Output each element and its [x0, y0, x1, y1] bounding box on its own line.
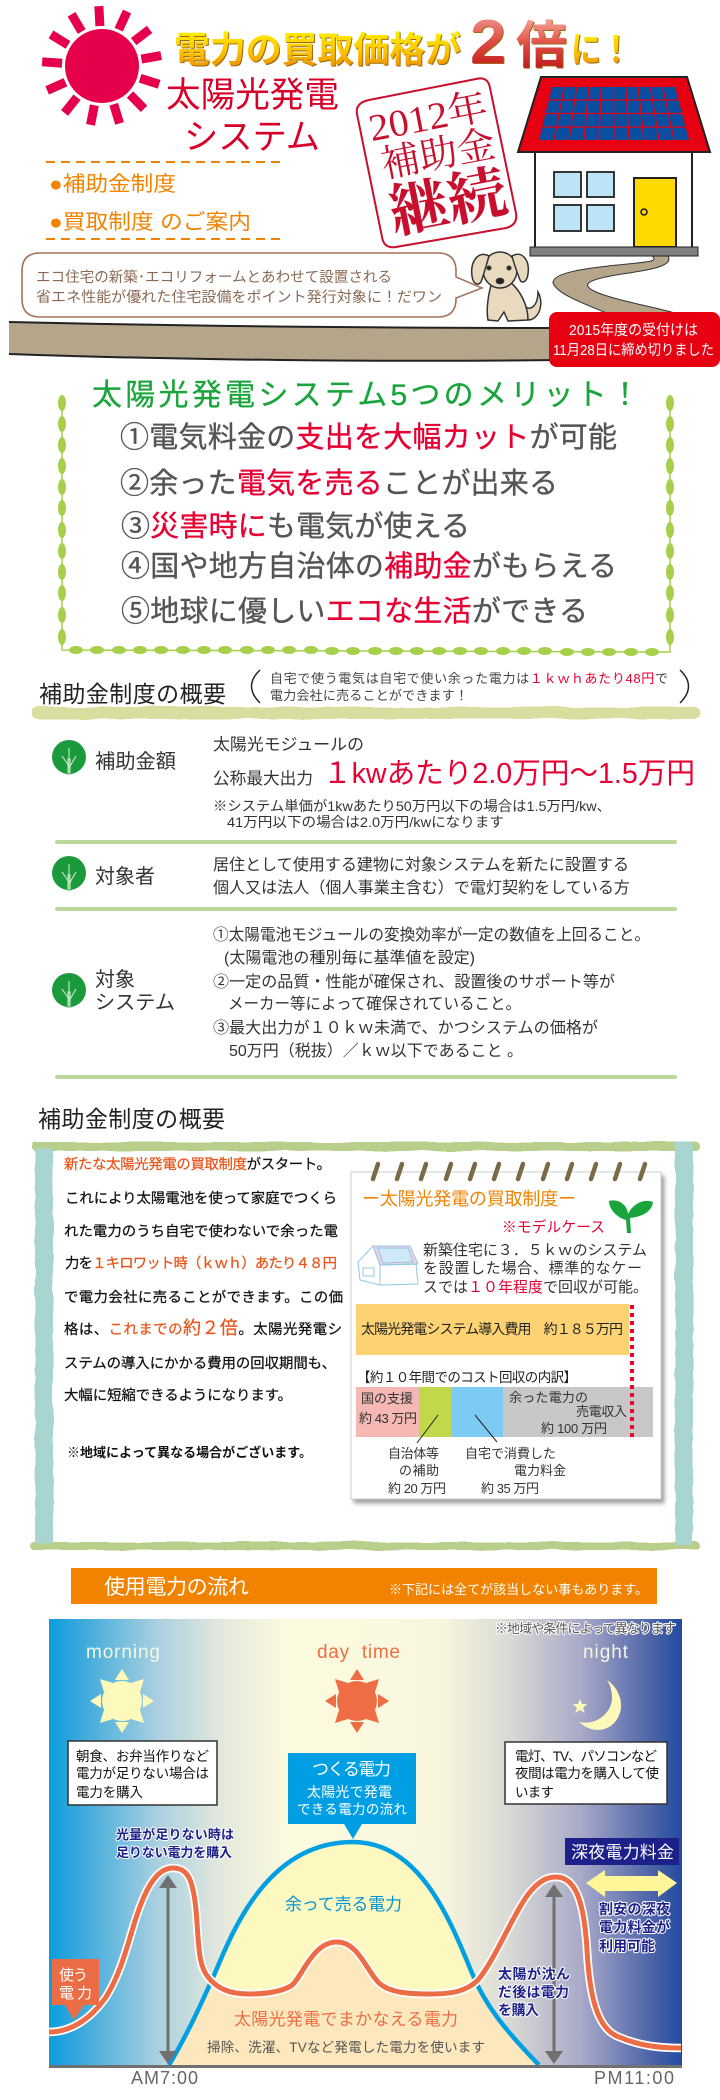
label: night: night [583, 1642, 629, 1663]
row: 対象システム: 50万円（税抜）／ｋｗ以下であること 。 [229, 1042, 523, 1060]
panel: notebook card [351, 1164, 661, 1499]
title: 電力の買取価格が2倍に！: 倍 [516, 17, 567, 74]
icon: notebook rings [373, 1164, 645, 1179]
header bar: 使用電力の流れ [71, 1568, 657, 1604]
row: 補助金額: 公称最大出力 [213, 769, 313, 788]
label: 太陽光発電でまかなえる電力: 太陽光発電でまかなえる電力 [234, 2010, 458, 2029]
list: guide items: ●補助金制度 [49, 173, 176, 196]
row: 対象システム: システム [95, 992, 175, 1014]
list: guide items [46, 162, 281, 239]
heading: 太陽光発電システム: 太陽光発電 [166, 76, 339, 115]
title: 電力の買取価格が2倍に！: に！ [571, 29, 631, 70]
row: 対象者 [52, 856, 630, 897]
callout: night: 夜間は電力を購入して使 [515, 1765, 660, 1781]
chart: cost recovery breakdown: 自治体等 [388, 1446, 439, 1461]
row: 対象者: 居住として使用する建物に対象システムを新たに設置する [213, 856, 629, 874]
callout: night: います [515, 1785, 554, 1800]
stamp: 2012年補助金継続: 継続 [384, 159, 512, 246]
notice: red deadline box: 2015年度の受付けは [569, 322, 698, 339]
chart: cost recovery breakdown: 電力料金 [514, 1463, 566, 1478]
icon: day sun [325, 1669, 389, 1733]
arrow: night height [545, 1884, 563, 2064]
speech bubble [22, 253, 482, 317]
panel: notebook card: 【約１０年間でのコスト回収の内訳】 [357, 1370, 577, 1385]
speech bubble: エコ住宅の新築･エコリフォームとあわせて設置される [36, 268, 392, 286]
heading: 太陽光発電システム [166, 76, 339, 157]
arrow: night span [586, 1870, 677, 1897]
chart: cost recovery breakdown: 約 43 万円 [359, 1411, 417, 1426]
text block: purchase scheme: ※地域によって異なる場合がございます。 [67, 1445, 312, 1460]
panel: power flow diagram [49, 1619, 682, 2088]
icon: tree [52, 856, 86, 890]
merit 3: ③災害時にも電気が使える [121, 510, 470, 543]
label: usage examples: 掃除、洗濯、TVなど発電した電力を使います [207, 2039, 485, 2055]
row: 対象システム: メーカー等によって確保されていること。 [228, 995, 521, 1013]
note in parentheses [252, 670, 688, 703]
panel: five merits [58, 379, 674, 656]
callout: つくる電力: つくる電力 [312, 1760, 391, 1779]
label: 深夜電力料金: 深夜電力料金 [571, 1843, 674, 1862]
chart: power generation and usage curves [49, 1842, 682, 2068]
text block: purchase scheme: これにより太陽電池を使って家庭でつくら [65, 1190, 337, 1207]
illustration: dog [472, 252, 541, 321]
illustration: winding path and ground [9, 256, 700, 361]
chart: cost recovery breakdown: 国の支援 [361, 1391, 413, 1406]
row: 対象システム: ②一定の品質・性能が確保され、設置後のサポート等が [213, 973, 615, 991]
header bar: 使用電力の流れ: ※下記には全てが該当しない事もあります。 [389, 1582, 648, 1597]
callout: つくる電力 [288, 1753, 416, 1839]
panel: power flow diagram: ※地域や条件によって異なります [495, 1621, 676, 1636]
label: 深夜電力料金 [565, 1838, 679, 1865]
row: 対象システム: ①太陽電池モジュールの変換効率が一定の数値を上回ること。 [213, 926, 650, 944]
callout: night [505, 1742, 667, 1804]
merit 1: ①電気料金の支出を大幅カットが可能 [120, 421, 617, 454]
callout: 使う電力: 電力 [59, 1985, 92, 2002]
text block: purchase scheme: ステムの導入にかかる費用の回収期間も、 [64, 1355, 336, 1372]
chart: cost recovery breakdown: 売電収入 [576, 1404, 627, 1419]
row: 対象システム: 対象 [95, 968, 135, 991]
note: cheap night rate [599, 1901, 670, 1954]
row: 補助金額: ※システム単価が1kwあたり50万円以下の場合は1.5万円/kw、 [213, 798, 611, 814]
heading: 補助金制度の概要 second: 補助金制度の概要 [38, 1106, 225, 1132]
text block: purchase scheme [64, 1156, 343, 1460]
row: 補助金額 [52, 735, 695, 830]
panel: notebook card: を設置した場合、標準的なケー [423, 1260, 642, 1277]
note: after sunset: 太陽が沈ん [498, 1966, 570, 1982]
axis label: PM11:00: PM11:00 [594, 2068, 674, 2088]
note: cheap night rate: 利用可能 [599, 1938, 655, 1954]
icon: morning sun [90, 1669, 154, 1733]
merit 2: ②余った電気を売ることが出来る [120, 467, 558, 500]
callout: morning: 電力が足りない場合は [76, 1766, 209, 1781]
chart: cost recovery breakdown: 約 35 万円 [481, 1481, 539, 1496]
callout: つくる電力: できる電力の流れ [297, 1802, 408, 1817]
text block: purchase scheme: 力を１キロワット時（ｋｗｈ）あたり４８円 [65, 1255, 337, 1272]
icon: red sun [42, 6, 162, 126]
heading: 補助金制度の概要: 補助金制度の概要 [39, 681, 226, 707]
text block: purchase scheme: れた電力のうち自宅で使わないで余った電 [64, 1223, 338, 1240]
title: 電力の買取価格が2倍に！ [174, 8, 631, 77]
panel: notebook card: スでは１０年程度で回収が可能。 [423, 1279, 648, 1296]
panel: brush frame [30, 1142, 700, 1550]
icon: tree [52, 973, 86, 1007]
icon: sketched house [358, 1246, 418, 1285]
merit 5: ⑤地球に優しいエコな生活ができる [121, 595, 588, 628]
row: 対象者: 個人又は法人（個人事業主含む）で電灯契約をしている方 [213, 879, 630, 897]
stamp: 2012年補助金継続 [357, 78, 516, 247]
note: after sunset [498, 1966, 570, 2018]
panel: notebook card: ※モデルケース [502, 1218, 605, 1236]
heading: 太陽光発電システム: システム [184, 118, 320, 157]
note in parentheses: 自宅で使う電気は自宅で使い余った電力は１ｋｗｈあたり48円で [270, 671, 668, 686]
chart: cost recovery breakdown: の補助 [399, 1463, 439, 1478]
label: day time: day time [317, 1642, 400, 1663]
bar: installation cost [356, 1304, 629, 1355]
text block: purchase scheme: 新たな太陽光発電の買取制度がスタート。 [64, 1156, 331, 1173]
row: 補助金額: １kwあたり2.0万円～1.5万円 [323, 758, 695, 790]
axis label: AM7:00: AM7:00 [131, 2068, 198, 2088]
callout: morning: 朝食、お弁当作りなど [76, 1749, 210, 1764]
arrow: morning height [159, 1875, 177, 2064]
icon: moon and star [573, 1680, 621, 1730]
note in parentheses: 電力会社に売ることができます！ [270, 688, 468, 703]
text block: purchase scheme: 大幅に短縮できるようになります。 [64, 1387, 292, 1404]
note: morning shortage [116, 1827, 234, 1860]
callout: 使う電力: 使う [59, 1967, 88, 1984]
row: 補助金額: 41万円以下の場合は2.0万円/kwになります [227, 814, 504, 830]
notice: red deadline box [549, 312, 720, 367]
note: cheap night rate: 割安の深夜 [599, 1901, 670, 1917]
row: 補助金額: 補助金額 [95, 750, 176, 773]
header bar: 使用電力の流れ: 使用電力の流れ [104, 1576, 249, 1599]
panel: notebook card: 新築住宅に３．５ｋｗのシステム [423, 1241, 647, 1259]
note: after sunset: だ後は電力 [498, 1984, 569, 2000]
title: 電力の買取価格が2倍に！: 電力の買取価格が [174, 29, 461, 70]
row: 補助金額: 太陽光モジュールの [213, 735, 364, 754]
chart: cost recovery breakdown: 約 100 万円 [541, 1421, 607, 1436]
chart: cost recovery breakdown: 余った電力の [509, 1390, 588, 1405]
chart: cost recovery breakdown: 自宅で消費した [465, 1446, 556, 1461]
panel: notebook card: ー太陽光発電の買取制度ー [362, 1189, 576, 1209]
text block: purchase scheme: 格は、これまでの約２倍。太陽光発電シ [64, 1318, 342, 1338]
note: morning shortage: 光量が足りない時は [116, 1827, 234, 1842]
callout: 使う電力 [52, 1959, 99, 2020]
icon: sprout [609, 1200, 653, 1233]
note: cheap night rate: 電力料金が [599, 1919, 670, 1935]
note: after sunset: を購入 [498, 2002, 539, 2018]
row: 対象システム: (太陽電池の種別毎に基準値を設定) [224, 949, 475, 967]
chart: cost recovery breakdown [356, 1305, 653, 1496]
stamp: 2012年補助金継続: 2012年 [365, 86, 491, 150]
merit 4: ④国や地方自治体の補助金がもらえる [121, 550, 617, 583]
stamp: 2012年補助金継続: 補助金 [378, 123, 499, 187]
list: guide items: ●買取制度 のご案内 [49, 211, 251, 234]
callout: morning [68, 1741, 217, 1805]
label: morning: morning [86, 1642, 160, 1663]
row: 対象システム: ③最大出力が１０ｋｗ未満で、かつシステムの価格が [213, 1019, 598, 1037]
note: morning shortage: 足りない電力を購入 [116, 1845, 232, 1860]
text block: purchase scheme: で電力会社に売ることができます。この価 [64, 1289, 343, 1306]
bar: installation cost: 太陽光発電システム導入費用 約１８５万円 [361, 1321, 623, 1337]
callout: morning: 電力を購入 [76, 1785, 144, 1800]
callout: night: 電灯、TV、パソコンなど [515, 1749, 658, 1764]
heading: merits title: 太陽光発電システム5つのメリット！ [92, 379, 640, 412]
chart: cost recovery breakdown: 約 20 万円 [388, 1481, 446, 1496]
speech bubble: 省エネ性能が優れた住宅設備をポイント発行対象に！だワン [36, 289, 442, 306]
label: 余って売る電力: 余って売る電力 [285, 1895, 402, 1914]
title: 電力の買取価格が2倍に！: 2 [470, 8, 506, 77]
row: 対象システム [52, 926, 650, 1060]
callout: つくる電力: 太陽光で発電 [307, 1784, 392, 1800]
row: 対象者: 対象者 [95, 865, 155, 888]
icon: tree [52, 740, 86, 774]
illustration: house with solar panels [518, 77, 710, 256]
